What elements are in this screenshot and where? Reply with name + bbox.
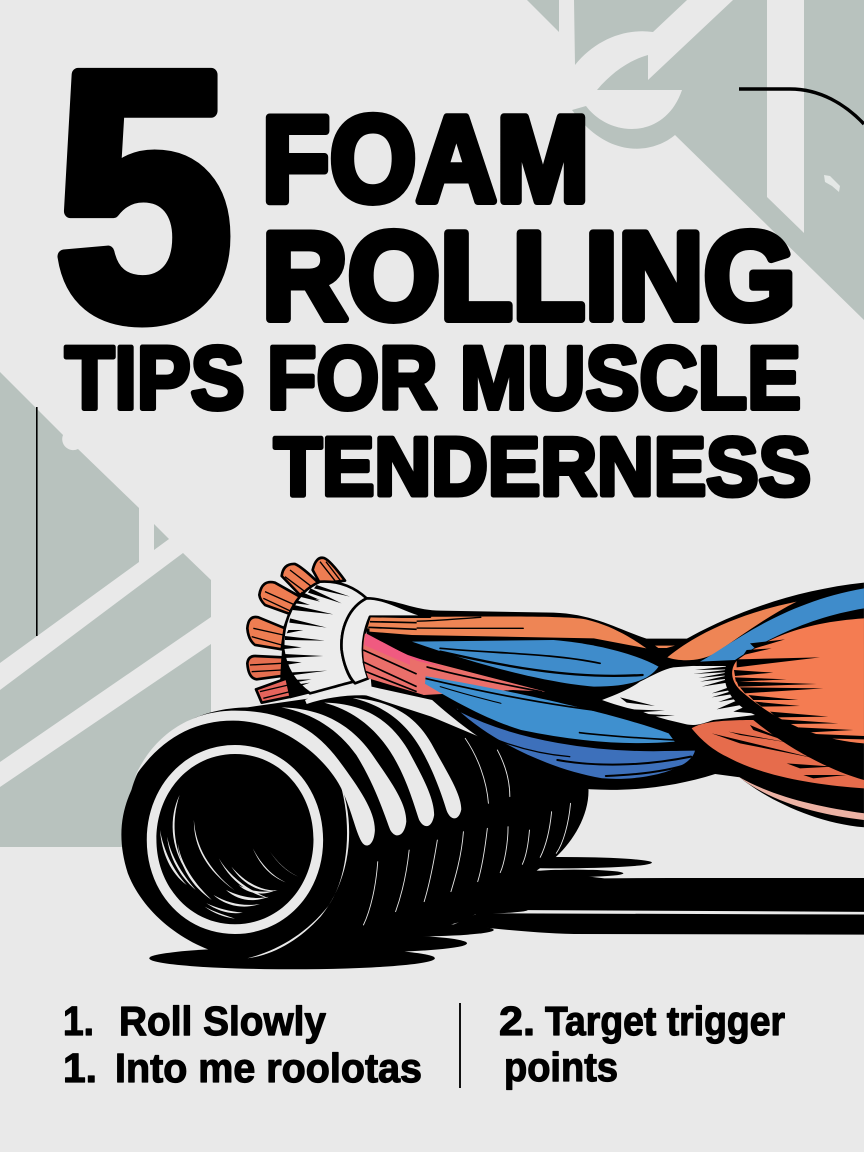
number: 1. bbox=[63, 1045, 97, 1091]
small paint fleck bbox=[824, 175, 840, 192]
background geometric shapes: left bbox=[0, 372, 211, 847]
title line: FOAM: FOAM bbox=[262, 91, 589, 227]
lower orange bbox=[692, 720, 864, 788]
tendon over roller bbox=[305, 688, 380, 704]
decorative curved line bbox=[739, 89, 864, 124]
shoulder orange belly bbox=[732, 618, 864, 743]
upper blue strip bbox=[700, 588, 864, 662]
muscle fibre lines bbox=[365, 617, 691, 776]
muscle: lower dark blue bbox=[456, 708, 695, 779]
muscle: upper orange bbox=[369, 616, 646, 648]
muscle: pink fibres bbox=[363, 637, 545, 695]
vertical divider bbox=[459, 1003, 461, 1088]
thin vertical line bbox=[36, 407, 38, 636]
white tendon bbox=[602, 663, 755, 725]
wrist collar and brush bbox=[247, 558, 430, 704]
title number 5: 5 bbox=[54, 0, 233, 392]
label: Into me roolotas bbox=[115, 1045, 422, 1091]
label: Roll Slowly bbox=[119, 998, 326, 1044]
upper orange sliver bbox=[667, 602, 797, 660]
bottom pink strip bbox=[738, 777, 864, 820]
tip: 2. Target trigger points bbox=[499, 998, 785, 1090]
roller inner hole highlights bbox=[160, 795, 298, 919]
white collar bbox=[341, 598, 430, 683]
label continuation: points bbox=[504, 1044, 618, 1090]
muscle: upper blue bbox=[412, 640, 659, 687]
wrist orange top bbox=[367, 617, 417, 632]
roller black body bbox=[121, 693, 589, 959]
tip: 1. Into me roolotas bbox=[63, 1045, 422, 1091]
wrist pink fibres bbox=[363, 633, 427, 695]
wrist fibre lines bbox=[363, 622, 417, 692]
finger fibre lines bbox=[250, 562, 340, 698]
wrist pink highlight bbox=[364, 633, 410, 665]
foam roller bbox=[121, 693, 589, 959]
muscle: right side belly and tendon bbox=[602, 588, 864, 820]
tip: 1. Roll Slowly bbox=[63, 998, 326, 1044]
label: Target trigger bbox=[545, 998, 785, 1044]
small orange sliver bbox=[655, 646, 675, 648]
muscle: lower blue bbox=[408, 673, 675, 743]
subtitle line: TENDERNESS: TENDERNESS bbox=[274, 420, 811, 513]
subtitle line: TIPS FOR MUSCLE: TIPS FOR MUSCLE bbox=[65, 328, 801, 428]
number: 2. bbox=[499, 998, 535, 1044]
black backing behind fingers bbox=[280, 582, 320, 698]
roller rib highlights bbox=[363, 738, 571, 925]
number: 1. bbox=[63, 998, 94, 1044]
white brush bbox=[283, 582, 367, 693]
muscle illustration bbox=[247, 558, 864, 827]
muscle black silhouette bbox=[363, 583, 864, 827]
roller white inner ring bbox=[147, 745, 323, 934]
tendon and belly spikes bbox=[620, 639, 864, 778]
orange fingers bbox=[247, 558, 345, 703]
roller white ridges bbox=[135, 698, 461, 958]
background geometric shapes: top right bbox=[527, 0, 864, 320]
title line: ROLLING: ROLLING bbox=[262, 208, 796, 346]
brush spikes bbox=[284, 585, 350, 687]
ground shadow bbox=[149, 857, 864, 969]
